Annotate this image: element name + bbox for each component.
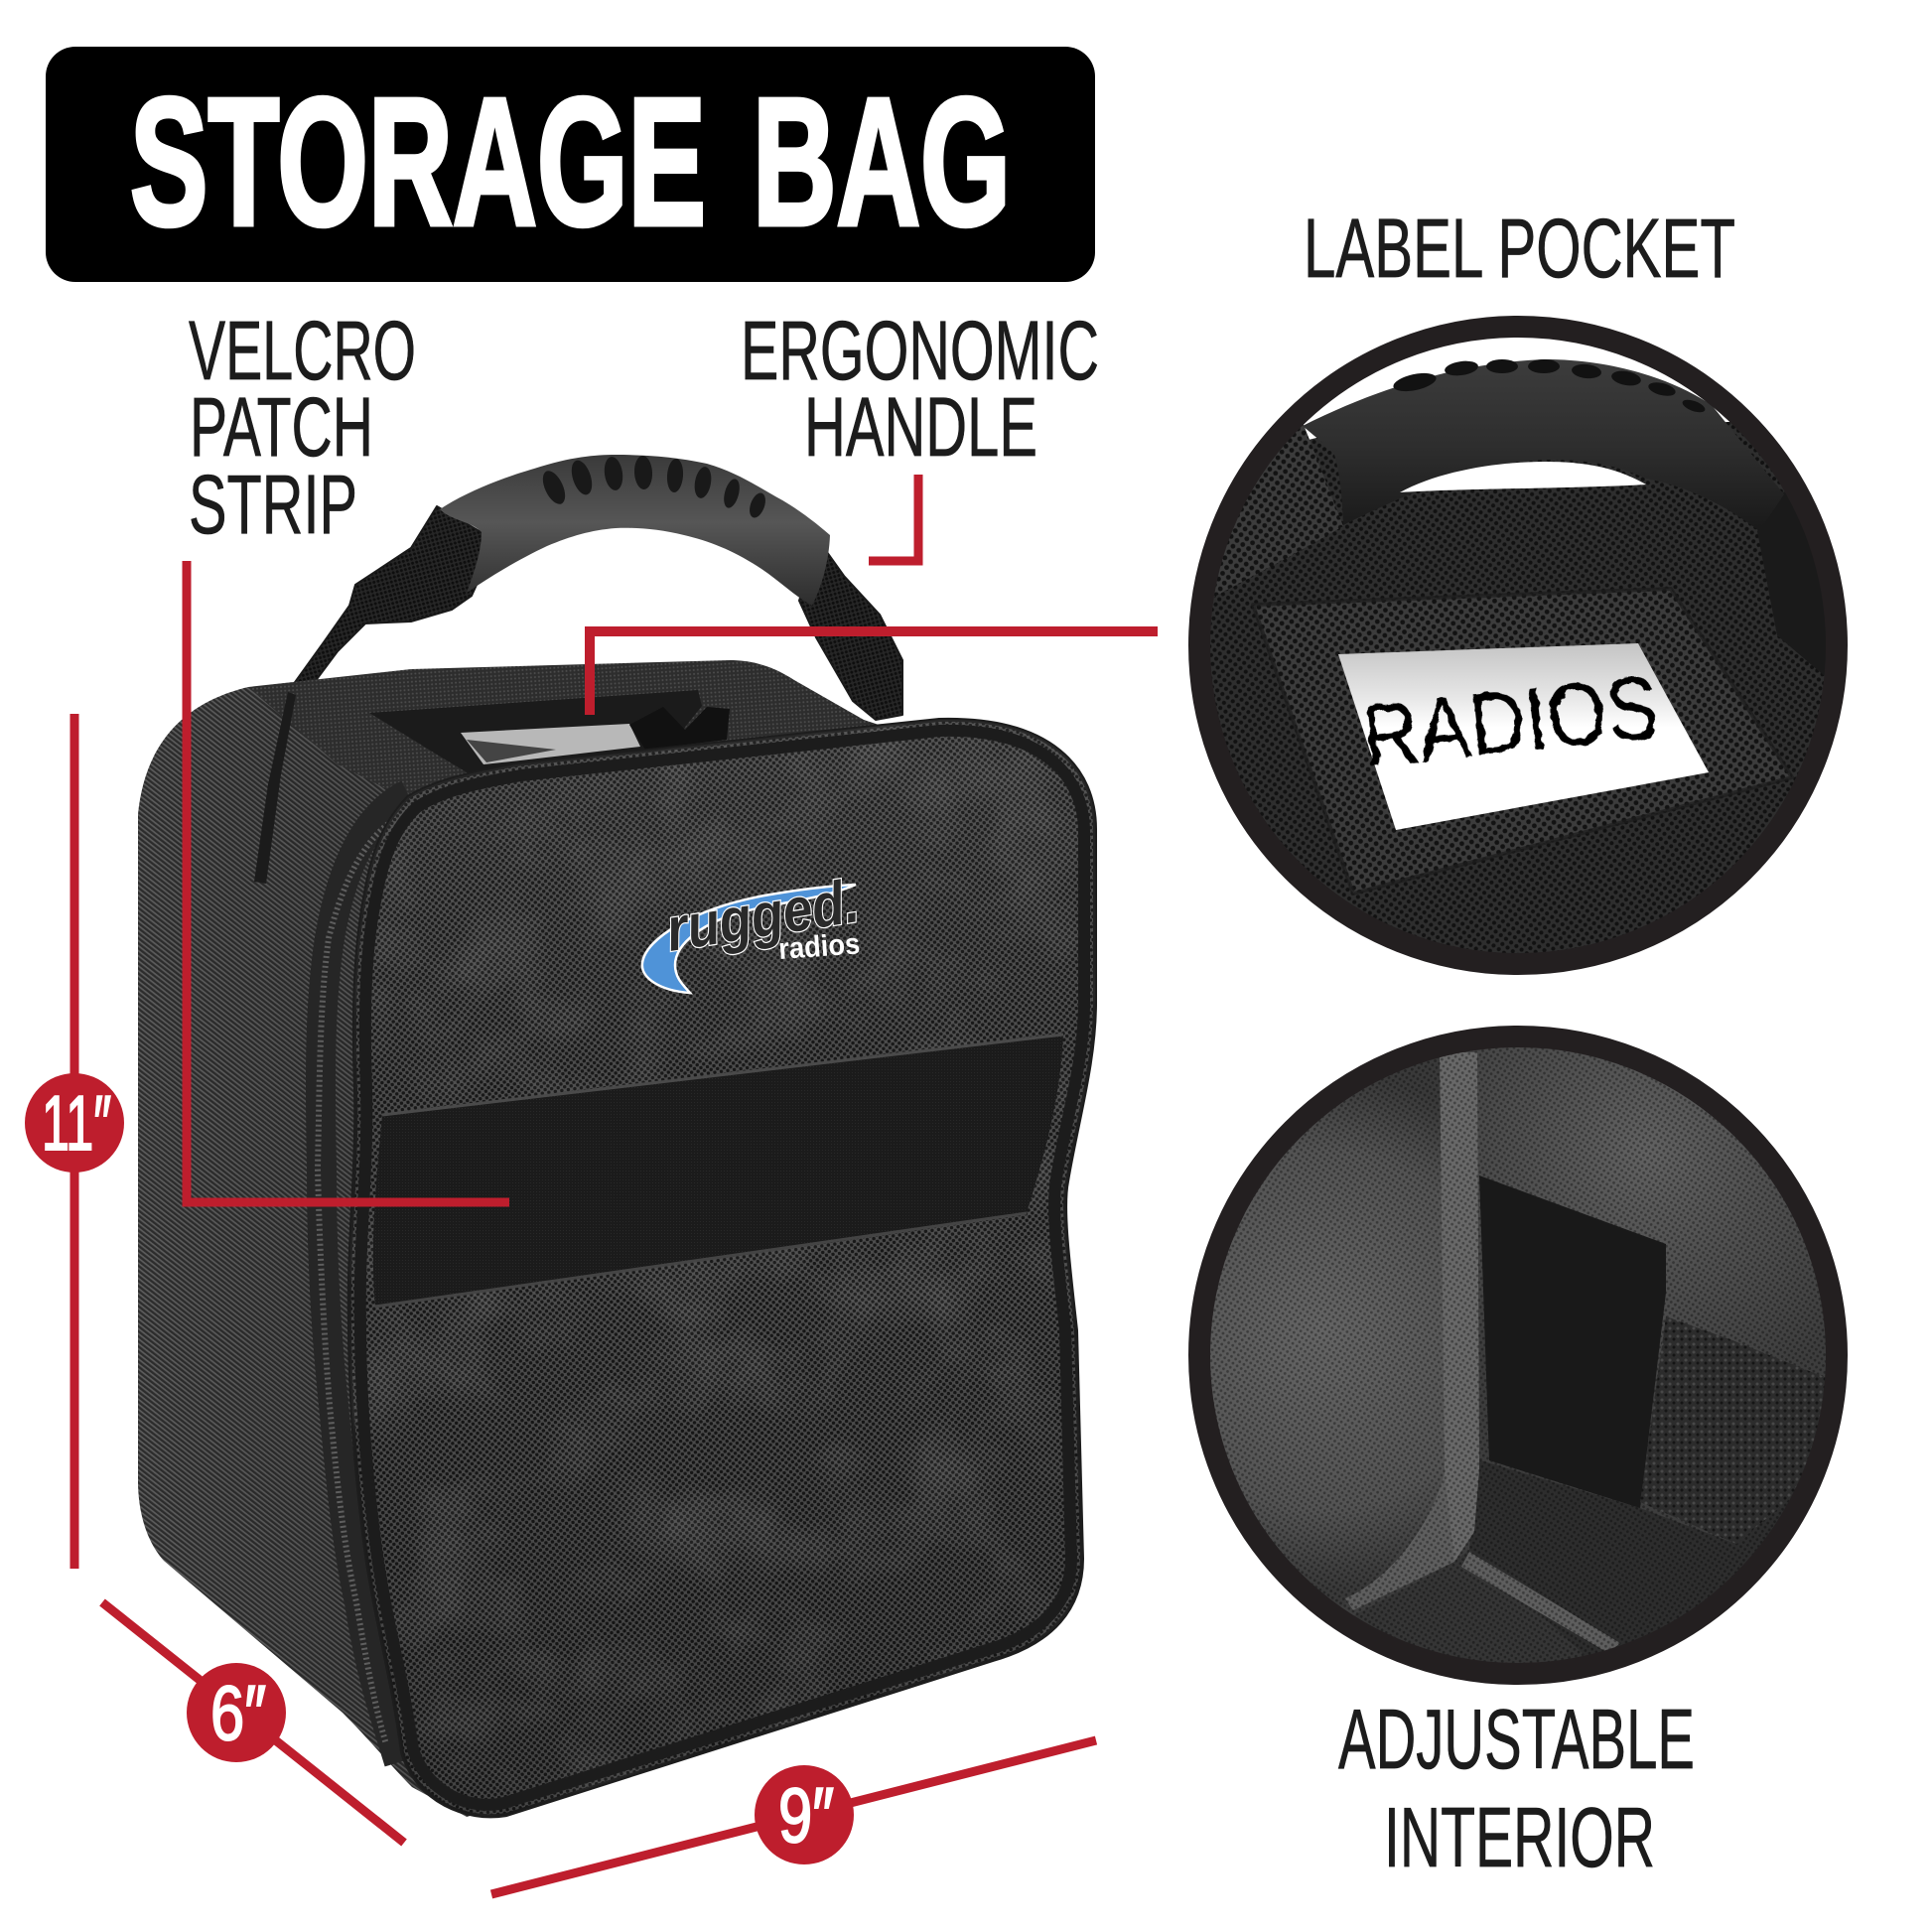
title banner [46, 47, 1095, 282]
clear label window [1338, 643, 1709, 830]
divider seam [1438, 1052, 1479, 1562]
zipper pulls [629, 707, 730, 750]
label: adjustable interior: ADJUSTABLE [1338, 1693, 1695, 1787]
left fabric panel [1210, 1058, 1445, 1553]
label: ergonomic handle: HANDLE [804, 380, 1037, 474]
label: velcro patch strip [189, 304, 416, 551]
label pocket on top of bag [369, 690, 702, 784]
dimension: height 11 inches: 11″ [42, 1079, 111, 1167]
title text: STORAGE [130, 60, 706, 263]
embroidered rugged radios logo: radios [777, 927, 861, 966]
front panel piping [360, 731, 1084, 1805]
front panel [338, 705, 1112, 1827]
label: ergonomic handle: ERGONOMIC [741, 304, 1099, 397]
detail circle: adjustable interior [1188, 1026, 1849, 1708]
fabric mottling [350, 725, 1050, 1791]
handle in close-up [1303, 359, 1784, 531]
label: adjustable interior: INTERIOR [1384, 1791, 1655, 1885]
circle border [1199, 327, 1837, 964]
dimension: width 9 inches: 9″ [778, 1771, 834, 1859]
velcro patch strip [373, 1035, 1063, 1307]
lower dark panels [1354, 1553, 1585, 1662]
callout line: label pocket [590, 631, 1158, 715]
handle grip [440, 455, 830, 606]
label: velcro patch strip: VELCRO [189, 304, 416, 397]
label: label pocket: LABEL POCKET [1304, 202, 1735, 295]
zipper band [321, 794, 408, 1762]
soft velcro patch [1479, 1175, 1666, 1508]
dimension: width 9 inches [491, 1740, 1096, 1894]
dimension: depth 6 inches: 6″ [210, 1669, 266, 1756]
handwritten label text: RADIOS [1358, 657, 1663, 787]
label: ergonomic handle [741, 304, 1099, 474]
handle strap right [799, 541, 902, 720]
white gap above handle [1304, 338, 1729, 440]
label: velcro patch strip: PATCH [190, 380, 373, 474]
callout line: velcro strip [187, 561, 509, 1202]
hook velcro strap [1640, 1316, 1825, 1543]
pocket frame [1253, 589, 1792, 894]
title text: BAG [753, 60, 1011, 263]
circle border [1199, 1036, 1837, 1674]
detail circle: label pocket [1188, 298, 1849, 975]
pocket stitching [1253, 589, 1792, 894]
dimension: height 11 inches [25, 714, 124, 1569]
bag illustration [138, 455, 1112, 1827]
top panel [248, 660, 894, 804]
handle strap left [251, 506, 496, 886]
side panel [138, 687, 596, 1817]
right strap fold [1757, 491, 1826, 675]
white crescent under handle [1400, 462, 1646, 492]
embroidered rugged radios logo [642, 867, 864, 993]
callout line: handle [869, 475, 918, 561]
label: velcro patch strip: STRIP [189, 458, 357, 551]
left strap fold [1213, 425, 1343, 598]
dimension: depth 6 inches [102, 1602, 404, 1843]
strap overlay on shoulder [254, 692, 296, 884]
label: adjustable interior [1338, 1693, 1695, 1885]
embroidered rugged radios logo: rugged. [661, 867, 864, 965]
